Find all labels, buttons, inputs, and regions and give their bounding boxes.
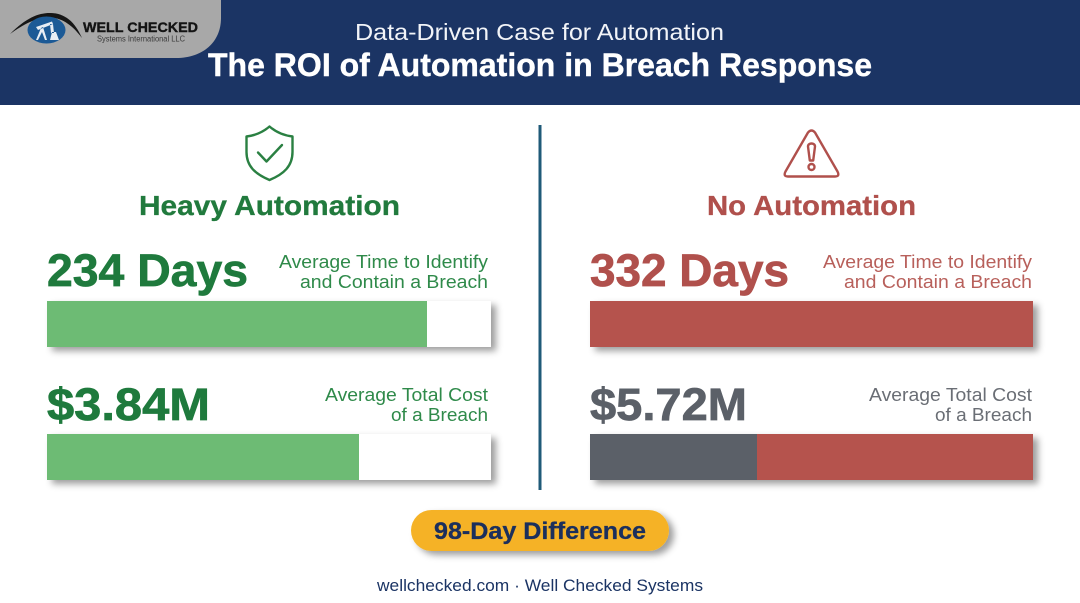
header subtitle: Data-Driven Case for Automation [355, 19, 724, 45]
icon: warning triangle [785, 130, 838, 176]
bar: no automation cost [590, 434, 1033, 480]
label: total cost [325, 385, 488, 425]
label: time to identify [823, 252, 1032, 292]
callout: 98-day difference [411, 510, 669, 551]
label: time to identify: Average Time to Identify [279, 252, 488, 272]
label: time to identify: and Contain a Breach [300, 272, 488, 292]
callout: 98-day difference: 98-Day Difference [434, 518, 646, 545]
header band [0, 0, 1080, 105]
logo wordmark: WELL CHECKED [83, 19, 198, 35]
center divider [538, 125, 542, 490]
label: time to identify: Average Time to Identify [823, 252, 1032, 272]
logo panel [0, 0, 221, 58]
bar: no automation time [590, 301, 1033, 347]
title: The ROI of Automation in Breach Response [208, 47, 872, 83]
label: total cost: Average Total Cost [325, 385, 488, 405]
bar: heavy automation cost [47, 434, 491, 480]
label: total cost: Average Total Cost [869, 385, 1032, 405]
label: total cost [869, 385, 1032, 425]
footer: wellchecked.com · Well Checked Systems [376, 576, 703, 595]
logo tagline: Systems International LLC [97, 34, 185, 44]
heading: heavy automation: Heavy Automation [139, 190, 400, 221]
stat: 332 days: 332 Days [590, 245, 789, 296]
icon: eye with oil pump [10, 13, 82, 44]
stat: 3.84M: $3.84M [47, 379, 210, 430]
stat: 5.72M: $5.72M [590, 379, 747, 430]
heading: no automation: No Automation [707, 190, 916, 221]
panel: heavy automation [47, 126, 491, 480]
icon: shield check [246, 126, 292, 180]
label: time to identify: and Contain a Breach [844, 272, 1032, 292]
label: time to identify [279, 252, 488, 292]
stat: 234 days: 234 Days [47, 245, 248, 296]
panel: no automation [590, 130, 1033, 480]
bar: heavy automation time [47, 301, 491, 347]
label: total cost: of a Breach [391, 405, 488, 425]
label: total cost: of a Breach [935, 405, 1032, 425]
